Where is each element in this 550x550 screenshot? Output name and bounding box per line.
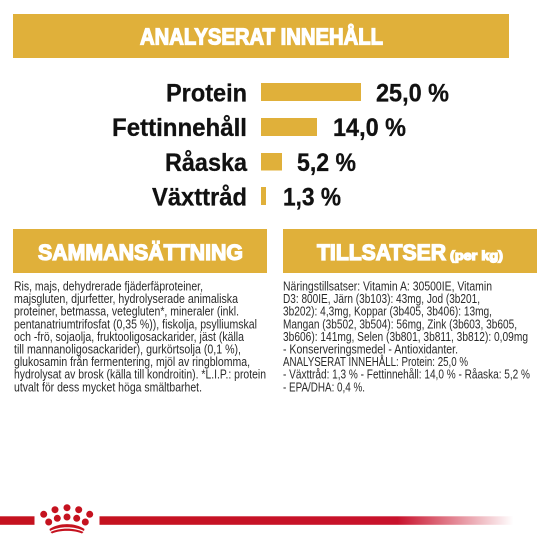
row: Råaska: [165, 149, 356, 177]
text block: additives: D3: 800IE, Järn (3b103): 43mg, Jod (3b201,: [283, 291, 480, 306]
panel: additives heading: (per kg): [450, 248, 503, 263]
text block: composition: till mannanoligosackarider), gurkörtsolja (0,1 %),: [14, 342, 241, 356]
text block: composition: hydrolysat av brosk (källa till kondroitin). *L.I.P.: protein: [14, 367, 266, 382]
text block: composition: och -frö, sojaolja, fruktooligosackarider, jäst (källa: [14, 329, 245, 344]
text block: composition: utvalt för dess mycket höga smältbarhet.: [14, 379, 202, 394]
row: Protein: [166, 80, 449, 108]
panel: additives heading: TILLSATSER: [317, 240, 446, 265]
text block: composition: majsgluten, djurfetter, hydrolyserade animaliska: [14, 291, 239, 306]
text block: composition: [14, 278, 266, 394]
row: Råaska: Råaska: [165, 149, 248, 177]
row: Fettinnehåll: Fettinnehåll: [112, 114, 247, 142]
panel: analysed content heading: ANALYSERAT INNEHÅLL: [140, 22, 383, 50]
row: Protein: Protein: [166, 80, 247, 108]
bar chart: analysed content: [112, 80, 449, 212]
panel: composition heading: SAMMANSÄTTNING: [38, 240, 243, 265]
text block: additives: ANALYSERAT INNEHÅLL: Protein: 25,0 %: [283, 354, 468, 369]
text block: composition: pentanatriumtrifosfat (0,35 %)), fiskolja, psylliumskal: [14, 316, 257, 331]
row: Protein: 25,0 %: [376, 80, 449, 108]
panel: composition heading: [13, 229, 267, 273]
row: Växttråd: Växttråd: [152, 184, 247, 212]
row: Råaska: 5,2 %: [297, 149, 356, 177]
row: Fettinnehåll: [112, 114, 406, 142]
icon: crown logo: [40, 504, 93, 534]
text block: additives: [283, 278, 530, 394]
text block: composition: Ris, majs, dehydrerade fjäderfäproteiner,: [14, 278, 203, 294]
footer stripe: right with fade: [100, 516, 514, 525]
row: Växttråd: [152, 184, 341, 212]
row: Fettinnehåll: 14,0 %: [333, 114, 406, 142]
text block: additives: Näringstillsatser: Vitamin A: 30500IE, Vitamin: [283, 278, 492, 294]
text block: composition: glukosamin från fermentering, mjöl av ringblomma,: [14, 354, 250, 369]
text block: additives: 3b202): 4,3mg, Koppar (3b405, 3b406): 13mg,: [283, 304, 492, 319]
text block: composition: proteiner, betmassa, vetegluten*, mineraler (inkl.: [14, 304, 239, 319]
text block: additives: - EPA/DHA: 0,4 %.: [283, 379, 365, 394]
text block: additives: - Konserveringsmedel - Antioxidanter.: [283, 342, 458, 356]
row: Växttråd: 1,3 %: [283, 184, 341, 212]
panel: analysed content heading: [13, 14, 509, 58]
panel: additives heading: [283, 229, 537, 273]
footer stripe: left: [0, 516, 34, 525]
